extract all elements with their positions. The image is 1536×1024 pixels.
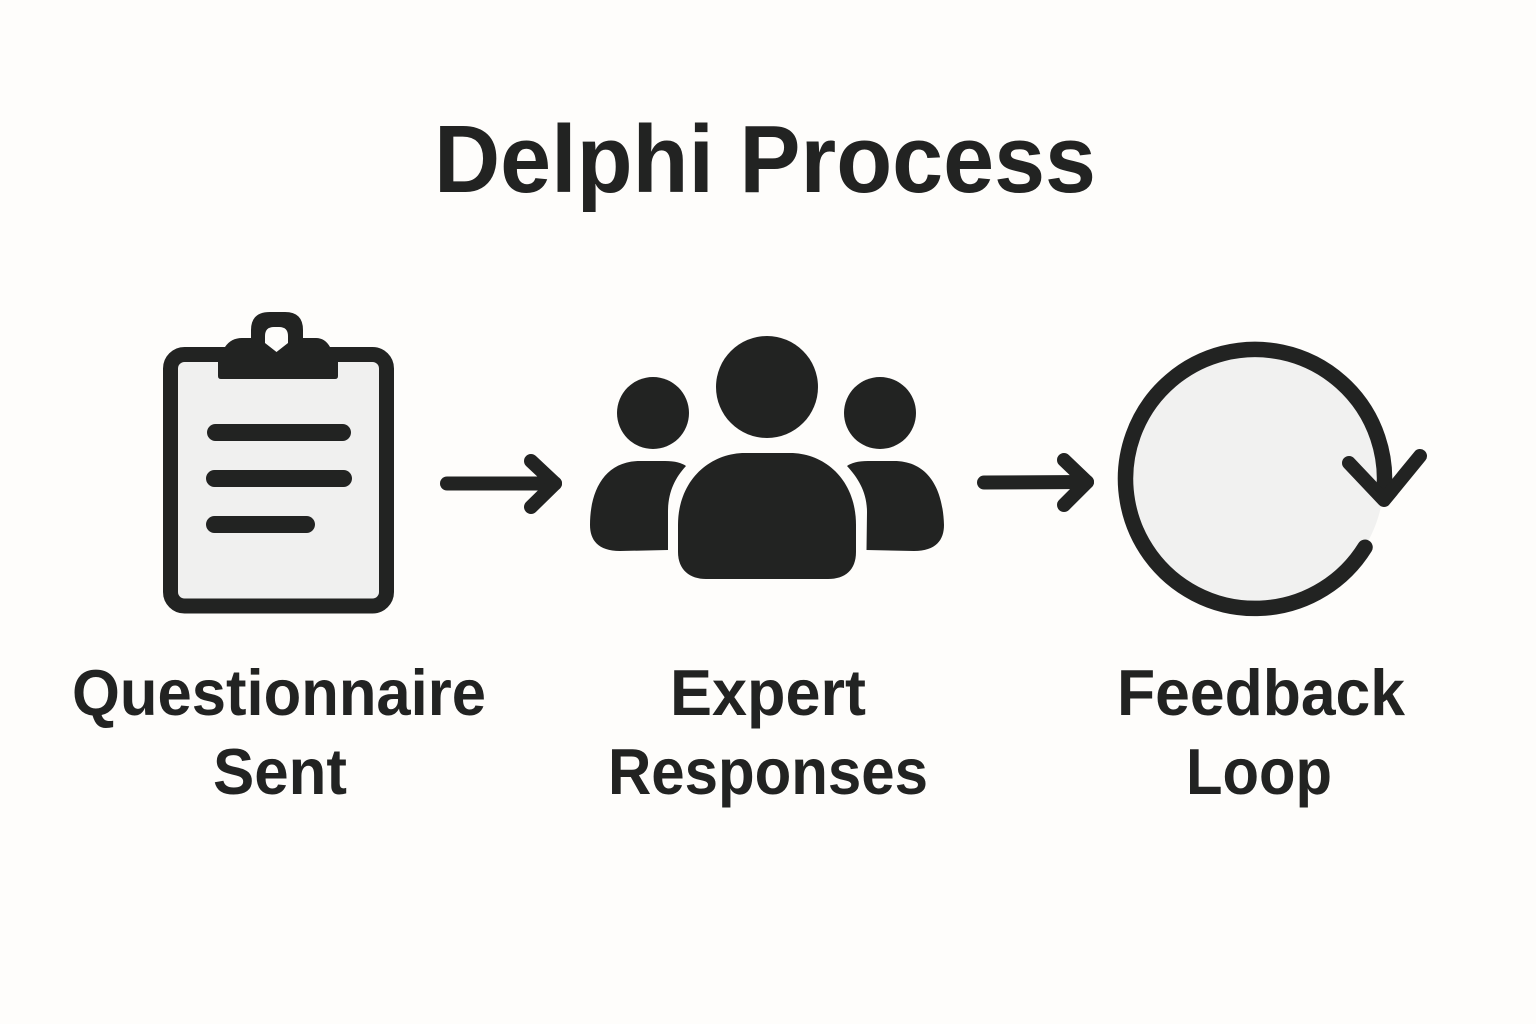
label: expert responses	[608, 656, 928, 808]
label: expert responses: Expert	[670, 656, 866, 729]
label: questionnaire sent: Questionnaire	[72, 656, 486, 729]
icon: feedback loop	[1126, 349, 1420, 608]
label: expert responses: Responses	[608, 735, 928, 808]
label: feedback loop	[1117, 656, 1406, 808]
label: feedback loop: Loop	[1186, 735, 1332, 808]
label: feedback loop: Feedback	[1117, 656, 1406, 729]
title: Delphi Process	[434, 106, 1096, 213]
label: questionnaire sent: Sent	[213, 735, 347, 808]
arrow: experts to feedback	[984, 460, 1087, 505]
arrow: questionnaire to experts	[447, 461, 555, 507]
label: questionnaire sent	[72, 656, 486, 808]
icon: clipboard	[170, 312, 386, 606]
icon: expert group	[590, 336, 944, 579]
